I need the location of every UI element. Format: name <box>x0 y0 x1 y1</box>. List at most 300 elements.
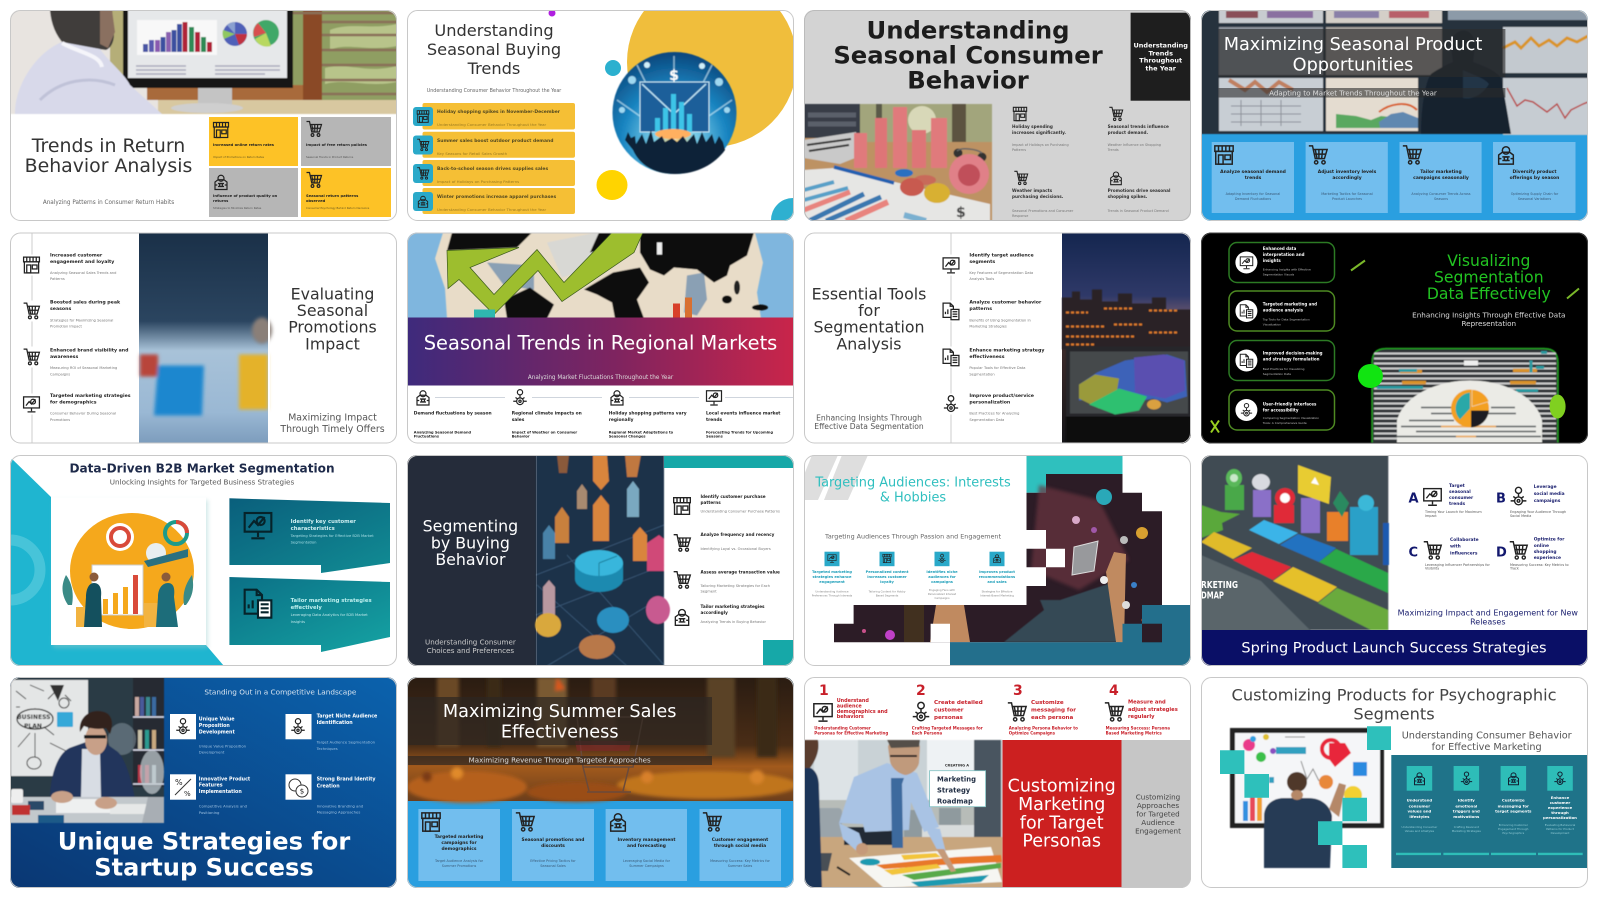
side box: Understanding <box>1134 42 1188 50</box>
item: weather: purchasing decisions. <box>1012 194 1064 199</box>
slide: Maximizing Summer Sales Effectiveness <box>407 677 797 888</box>
column: personalization: Development <box>1551 831 1570 835</box>
item: audience: Key Features of Segmentation Data <box>969 271 1033 275</box>
step 3: 3 <box>1013 683 1023 699</box>
heading: Evaluating <box>291 284 374 304</box>
item: visibility: Campaigns <box>50 372 70 376</box>
column: triggers <box>1452 766 1481 833</box>
heading: for <box>858 301 880 320</box>
banner: key characteristics: Targeting Strategies for Effective B2B Market <box>290 534 374 538</box>
heading: Data-Driven B2B Market Segmentation <box>69 461 335 475</box>
heading: Understanding <box>866 15 1070 44</box>
step 1: demographics and <box>837 709 888 715</box>
item: frequency: Identifying Loyal vs. Occasional Buyers <box>700 547 771 551</box>
item D: online <box>1534 543 1549 549</box>
item: promotions: shopping spikes. <box>1108 194 1148 199</box>
banner: key characteristics: characteristics <box>291 526 335 532</box>
heading: Opportunities <box>1293 56 1413 76</box>
timeline rule <box>950 232 952 444</box>
heading: Personas <box>1022 832 1101 852</box>
item: weather: Response <box>1012 214 1028 218</box>
item: purchase patterns <box>674 494 780 514</box>
photo: man planning at desk: BUSINESS <box>17 714 50 721</box>
card: interfaces <box>1229 390 1334 430</box>
item: niche audience: Target Audience Segmentation <box>316 740 376 745</box>
photo: bars, clock, coins: $ <box>956 205 966 221</box>
item: holiday <box>1012 107 1069 152</box>
column: personalization: customer <box>1550 800 1570 805</box>
subtitle: Understanding Consumer Behavior <box>1402 731 1572 742</box>
slide: Segmenting by Buying Behavior <box>407 455 794 666</box>
tile: inventory: and forecasting <box>627 843 666 849</box>
row: back to school: Impact of Holidays on Purchasing Patterns <box>437 179 519 184</box>
card shadow <box>53 500 208 648</box>
item: seasonal trends: Weather Influence on Shopping <box>1108 143 1161 147</box>
item: climate <box>512 390 582 438</box>
item: frequency <box>674 532 775 551</box>
item: audience: Identify target audience <box>969 252 1034 258</box>
step 4: Based Marketing Metrics <box>1106 730 1162 735</box>
row: winter <box>413 188 575 214</box>
subtitle: Targeting Audiences Through Passion and Engagement <box>824 533 1001 541</box>
step 2: customer <box>934 708 964 714</box>
heading: Segmenting <box>423 517 518 536</box>
row: summer: Summer sales boost outdoor product demand <box>437 138 553 144</box>
card: decision-making: Best Practices for Visualizing <box>1263 367 1305 371</box>
item: purchase patterns: patterns <box>700 500 721 505</box>
item: audience: Analysis Tools <box>969 277 994 281</box>
item: transaction value: Segment <box>700 590 717 594</box>
heading: Segments <box>1353 704 1435 723</box>
card: interfaces: Comparing Segmentation Visualization <box>1263 416 1319 420</box>
item C: with <box>1450 544 1461 550</box>
tile: campaigns: Targeted marketing <box>435 834 483 840</box>
item: behavior: Analyze customer behavior <box>969 300 1042 306</box>
row: summer: Key Seasons for Retail Sales Growth <box>437 151 508 156</box>
item: climate: Impact of Weather on Consumer <box>512 430 577 434</box>
photo: man at strategy roadmap <box>804 740 1002 888</box>
item: engagement: Increased customer <box>50 252 103 258</box>
connector line <box>435 396 795 398</box>
column: recommendations: Improves product <box>979 570 1015 574</box>
tile: tailor <box>1400 142 1482 213</box>
heading: Marketing <box>1018 795 1105 815</box>
column: loyalty: Tailoring Content for Hobby <box>868 590 906 594</box>
quote marks <box>794 455 868 500</box>
item: value proposition: Unique Value <box>199 717 235 723</box>
heading: Customizing <box>1008 777 1116 797</box>
row: back to school: Back-to-school season drives supplies sales <box>437 166 548 172</box>
item A: trends <box>1449 501 1466 507</box>
subtitle: for Effective Marketing <box>1432 742 1542 753</box>
column: personalization: Patterns for Product <box>1546 827 1575 831</box>
item: personalization: Segmentation Data <box>969 418 1004 422</box>
item: events <box>706 391 780 438</box>
item: strategy <box>940 346 1044 376</box>
heading: Startup Success <box>94 854 314 882</box>
card: targeted marketing <box>1229 291 1334 331</box>
item: climate: Behavior <box>512 434 530 438</box>
red panel <box>1002 740 1122 888</box>
roadmap card: Marketing <box>937 776 976 784</box>
photo: autumn leaves and cart <box>407 677 797 803</box>
photo: bars, clock, coins <box>804 104 992 221</box>
subtitle: for Targeted <box>1136 810 1180 819</box>
item: engagement <box>21 252 116 281</box>
subtitle: Customizing <box>1136 793 1180 802</box>
column: messaging: Engagement Through <box>1498 827 1529 831</box>
column: messaging: messaging for <box>1498 803 1529 808</box>
item: demand: Fluctuations <box>414 434 439 438</box>
step 3: Customize <box>1031 700 1064 706</box>
column: personalization: through <box>1551 810 1569 815</box>
illustration card <box>51 498 206 645</box>
banner: key characteristics <box>229 498 390 573</box>
item: purchase patterns: Identify customer purchase <box>700 494 766 499</box>
green dot left <box>1358 364 1383 388</box>
dark panel <box>407 455 536 666</box>
side box: the Year <box>1145 64 1177 72</box>
item: weather <box>1012 171 1074 218</box>
heading: Unique Strategies for <box>58 828 350 856</box>
item: product features: Innovative Product <box>199 776 251 782</box>
slide: Maximizing Seasonal Product Opportunities <box>1201 10 1588 221</box>
column: loyalty: loyalty <box>880 580 895 584</box>
card: decision-making: Segmentation Data <box>1263 372 1291 376</box>
item: targeting: for demographics <box>50 400 97 406</box>
roadmap label: RKETING <box>1201 580 1238 591</box>
column: personalization: Evaluating Behavioral <box>1545 823 1576 827</box>
item: strategy: Popular Tools for Effective Data <box>969 366 1026 370</box>
subtitle: Enhancing Insights Through <box>816 414 922 422</box>
card: interpretation: Enhancing Insights with Effective <box>1263 268 1311 272</box>
tile: free return policies <box>301 117 391 166</box>
title band <box>407 318 794 386</box>
item: strategy: effectiveness <box>969 354 1005 360</box>
side box: Throughout <box>1139 57 1182 65</box>
step 2: Create detailed <box>934 700 983 706</box>
card: targeted marketing: audience analysis <box>1263 308 1304 312</box>
banner: tailor strategies: Tailor marketing strategies <box>291 598 372 604</box>
subtitle: Enhancing Insights Through Effective Data <box>1412 310 1565 320</box>
illustration: crowd and chart orb <box>612 52 736 174</box>
tile: promotions: Effective Pricing Tactics for <box>530 859 576 863</box>
subtitle band <box>1218 88 1505 98</box>
tile: diversify <box>1493 142 1576 213</box>
item: behavior <box>940 300 1042 328</box>
subtitle: Approaches <box>1137 801 1179 810</box>
subtitle: Audience <box>1141 818 1175 827</box>
teal corner <box>771 198 794 221</box>
photo: man viewing monitor <box>10 10 397 114</box>
row: winter: Winter promotions increase apparel purchases <box>437 194 556 200</box>
heading: Seasonal Consumer <box>833 40 1103 69</box>
photo: marketing roadmap blocks <box>1201 455 1389 631</box>
slide: Unique Strategies for Startup Success <box>10 677 397 888</box>
slide: Spring Product Launch Success Strategies <box>1201 455 1588 666</box>
column: engagement: strategies enhance <box>813 575 852 579</box>
teal panel <box>1391 755 1588 868</box>
item: product features: % <box>175 778 183 787</box>
column: messaging: target segments <box>1495 809 1532 814</box>
item: engagement: Analyzing Seasonal Sales Trends and <box>50 271 116 275</box>
accent dashes <box>1351 260 1579 298</box>
tile: product quality: Strategies to Minimize Return Rates <box>213 206 262 210</box>
heading: Seasonal Trends in Regional Markets <box>424 332 777 354</box>
item D: shopping <box>1534 549 1557 555</box>
subtitle: Engagement <box>1135 826 1181 835</box>
step 4: Measuring Success: Persona <box>1106 725 1170 730</box>
step 1: audience <box>837 704 862 710</box>
side box <box>1131 13 1191 101</box>
row: holiday <box>413 103 575 130</box>
row: holiday: Understanding Consumer Behavior Throughout the Year <box>437 122 546 127</box>
tile: diversify: offerings by season <box>1510 175 1559 181</box>
column: niche <box>926 552 958 600</box>
step 1: behaviors <box>837 714 864 720</box>
banner: tailor strategies: Leveraging Data Analytics for B2B Market <box>291 613 368 617</box>
card: interfaces: for accessibility <box>1263 408 1299 412</box>
yellow blob <box>627 11 793 146</box>
tile: seasonal return patterns <box>301 168 391 217</box>
row: summer <box>413 132 575 158</box>
step 1 <box>814 683 888 735</box>
tile: free return policies: Impact of free return policies <box>306 143 368 147</box>
teal bar top <box>664 455 794 468</box>
column: values: consumer <box>1409 803 1430 808</box>
item: events: Local events influence market <box>706 410 780 416</box>
item D <box>1496 537 1569 570</box>
subtitle: Effective Data Segmentation <box>814 422 924 431</box>
tile: demand: Demand Fluctuations <box>1235 197 1271 201</box>
item: holiday: Regional Market Adaptations to <box>609 430 674 434</box>
item: tailor: Tailor marketing strategies <box>700 604 765 609</box>
roadmap card: Strategy <box>937 787 971 795</box>
item B: campaigns <box>1534 498 1561 504</box>
heading: Essential Tools <box>812 284 926 304</box>
title band <box>1201 630 1588 666</box>
column: personalization: experience <box>1548 805 1572 810</box>
item: personalization: Improve product/service <box>969 393 1034 399</box>
item: sales: Strategies for Maximizing Seasonal <box>50 318 113 322</box>
item: holiday: increases significantly. <box>1012 130 1066 135</box>
column: personalization: personalization <box>1543 815 1577 820</box>
restore corner photo <box>1142 624 1162 642</box>
item C: Collaborate <box>1450 537 1479 543</box>
banner: tailor strategies: Insights <box>291 620 305 624</box>
column: personalization <box>1543 766 1577 835</box>
slide: Seasonal Trends in Regional Markets <box>407 232 795 444</box>
photo: world map with arrow <box>407 232 794 318</box>
item: holiday: Patterns <box>1012 148 1026 152</box>
subtitle: Representation <box>1462 319 1516 328</box>
item: tailor: accordingly <box>700 610 728 615</box>
slide: Targeting Audiences: Interests & Hobbies <box>794 455 1191 666</box>
side box: Trends <box>1148 49 1173 57</box>
column: values: Understand <box>1407 798 1432 803</box>
item: purchase patterns: Understanding Consumer Purchase Patterns <box>700 510 780 514</box>
heading: Maximizing Seasonal Product <box>1224 35 1482 55</box>
heading: Behavior Analysis <box>25 155 192 177</box>
tile: demand: trends <box>1245 175 1262 181</box>
column: values <box>1402 766 1438 833</box>
item: strategy: Segmentation <box>969 372 995 376</box>
item: seasonal trends: product demand. <box>1108 130 1148 135</box>
photo: analyst before chart wall <box>1201 10 1588 135</box>
subtitle: Through Timely Offers <box>279 424 385 435</box>
column: triggers: triggers and <box>1453 809 1480 814</box>
tile: promotions: Seasonal promotions and <box>522 837 584 843</box>
column: niche: Campaigns <box>934 596 950 600</box>
tile: tailor: Analyzing Consumer Trends Across <box>1411 192 1471 196</box>
heading: Trends <box>467 59 520 78</box>
banner: tailor strategies <box>229 577 390 652</box>
heading: Behavior <box>907 66 1029 95</box>
slide: Visualizing Segmentation Data Effectively <box>1201 232 1588 444</box>
heading: Trends in Return <box>31 135 185 157</box>
title band <box>1218 29 1505 77</box>
tile: promotions: Seasonal Sales <box>540 864 566 868</box>
tile: diversify: Seasonal Variations <box>1518 197 1551 201</box>
slide: Customizing Products for Psychographic Segments <box>1201 677 1588 888</box>
card: interfaces: User-friendly interfaces <box>1263 402 1317 406</box>
item: promotions <box>1107 172 1171 213</box>
heading: Behavior <box>435 550 506 569</box>
tile: campaigns: Summer Promotions <box>442 864 476 868</box>
item: engagement: engagement and loyalty <box>50 259 114 265</box>
photo: man planning at desk: PLAN <box>24 723 42 730</box>
card: interpretation <box>1229 242 1334 282</box>
item: niche audience: Identification <box>317 720 353 726</box>
roadmap card <box>930 764 986 807</box>
green dot right <box>1550 394 1566 418</box>
column: recommendations <box>979 552 1015 598</box>
purple dot <box>548 11 556 16</box>
card: decision-making: and strategy formulation <box>1263 356 1320 362</box>
item: holiday: regionally <box>609 417 634 423</box>
item B: Leverage <box>1534 484 1557 490</box>
item: holiday: Impact of Holidays on Purchasing <box>1012 143 1069 147</box>
item: product features: Competitive Analysis and <box>199 804 248 809</box>
item: transaction value <box>674 569 780 594</box>
accent bars <box>1396 853 1583 855</box>
item D: D <box>1496 546 1507 561</box>
item: events: Seasons <box>706 434 723 438</box>
item C: influencers <box>1450 550 1478 556</box>
item: demand: Analyzing Seasonal Demand <box>414 430 472 434</box>
column: engagement: Understanding Audience <box>815 590 849 594</box>
item: strategy: Enhance marketing strategy <box>969 348 1044 354</box>
item: weather: Seasonal Promotions and Consumer <box>1012 209 1074 213</box>
column: triggers: Identify <box>1458 798 1475 803</box>
roadmap label: DMAP <box>1201 590 1224 602</box>
banner: key characteristics: Segmentation <box>291 541 317 545</box>
tile: promotions: discounts <box>541 843 565 849</box>
roadmap card: CREATING A <box>945 764 969 768</box>
step 4: 4 <box>1109 683 1119 699</box>
column: loyalty: Based Segments <box>876 594 899 598</box>
heading: Analysis <box>836 334 902 354</box>
column: loyalty: increases customer <box>867 575 907 579</box>
subtitle: Maximizing Impact and Engagement for New <box>1398 608 1578 617</box>
gray panel <box>1122 740 1192 888</box>
tile: social media: Measuring Success: Key Metrics for <box>710 859 771 863</box>
item: frequency: Analyze frequency and recency <box>700 532 775 537</box>
tile: inventory: Summer Campaigns <box>629 864 664 868</box>
heading: Maximizing Summer Sales <box>443 702 677 722</box>
item D: Optimize for <box>1534 537 1565 543</box>
tile: promotions <box>512 809 594 881</box>
item A: Target <box>1449 483 1465 489</box>
card: decision-making: Improved decision-making <box>1263 350 1323 356</box>
heading: Segmentation <box>1434 268 1544 286</box>
tile: inventory: Adjust inventory levels <box>1318 169 1377 175</box>
column: triggers: Crafting Resonant <box>1454 825 1480 829</box>
subtitle: Maximizing Impact <box>288 412 377 424</box>
heading: Data Effectively <box>1427 285 1551 303</box>
item C <box>1408 537 1490 570</box>
tile: inventory: Leveraging Social Media for <box>623 859 671 863</box>
item: transaction value: Tailoring Marketing Strategies for Each <box>700 584 770 588</box>
column: loyalty: Personalized content <box>866 570 909 574</box>
tile: seasonal return patterns: Seasonal return patterns <box>306 194 359 198</box>
slide: Data-Driven B2B Market Segmentation <box>0 455 397 666</box>
item: transaction value: Assess average transaction value <box>700 569 780 574</box>
card: targeted marketing: Top Tools for Data Segmentation <box>1262 318 1310 322</box>
item: value proposition: Development <box>199 749 225 754</box>
slide: Evaluating Seasonal Promotions Impact <box>10 232 397 444</box>
slide: Trends in Return Behavior Analysis <box>10 10 397 221</box>
step 4: Measure and <box>1128 700 1166 706</box>
item: seasonal trends <box>1107 107 1169 152</box>
item: sales: seasons <box>50 307 71 312</box>
column: messaging: Enhancing Customer <box>1499 823 1529 827</box>
subtitle: Releases <box>1470 618 1506 627</box>
step 2: Each Persona <box>912 730 942 735</box>
item: promotions: Trends in Seasonal Product Demand <box>1107 209 1169 213</box>
banner: tailor strategies: effectively <box>291 605 322 611</box>
tile: demand <box>1212 142 1294 213</box>
item D: Measuring Success: Key Metrics to <box>1510 563 1569 567</box>
step 3 <box>1008 683 1078 735</box>
item: visibility: Enhanced brand visibility and <box>50 348 128 354</box>
column: triggers: motivations <box>1453 814 1480 819</box>
photo: man at colourful board <box>1230 728 1384 868</box>
photo: man planning at desk <box>10 677 164 823</box>
teal mosaic tiles <box>1220 726 1391 868</box>
item B: Engaging Your Audience Through <box>1510 510 1566 514</box>
teal block bottom <box>763 640 794 666</box>
item: value proposition: Unique Value Proposition <box>199 743 247 748</box>
column: engagement: engagement <box>819 580 845 584</box>
step 1: 1 <box>819 683 829 699</box>
heading: Spring Product Launch Success Strategies <box>1241 641 1547 657</box>
item: niche audience <box>286 713 378 751</box>
card: targeted marketing: Visualization <box>1263 322 1281 326</box>
step 3: messaging for <box>1031 708 1076 714</box>
tile: product quality <box>209 168 298 217</box>
heading: & Hobbies <box>880 491 946 506</box>
item: engagement: Patterns <box>50 277 65 281</box>
step 1: Understand <box>837 698 869 704</box>
illustration: crowd and chart orb: $ <box>669 68 679 84</box>
photo: city and laptop map <box>1062 232 1191 444</box>
banner: key characteristics: Identify key customer <box>291 519 356 525</box>
item B: social media <box>1534 491 1565 497</box>
tile: diversify: Diversify product <box>1513 169 1557 175</box>
tile: tailor: Seasons <box>1434 197 1448 201</box>
step 4: adjust strategies <box>1128 707 1178 713</box>
